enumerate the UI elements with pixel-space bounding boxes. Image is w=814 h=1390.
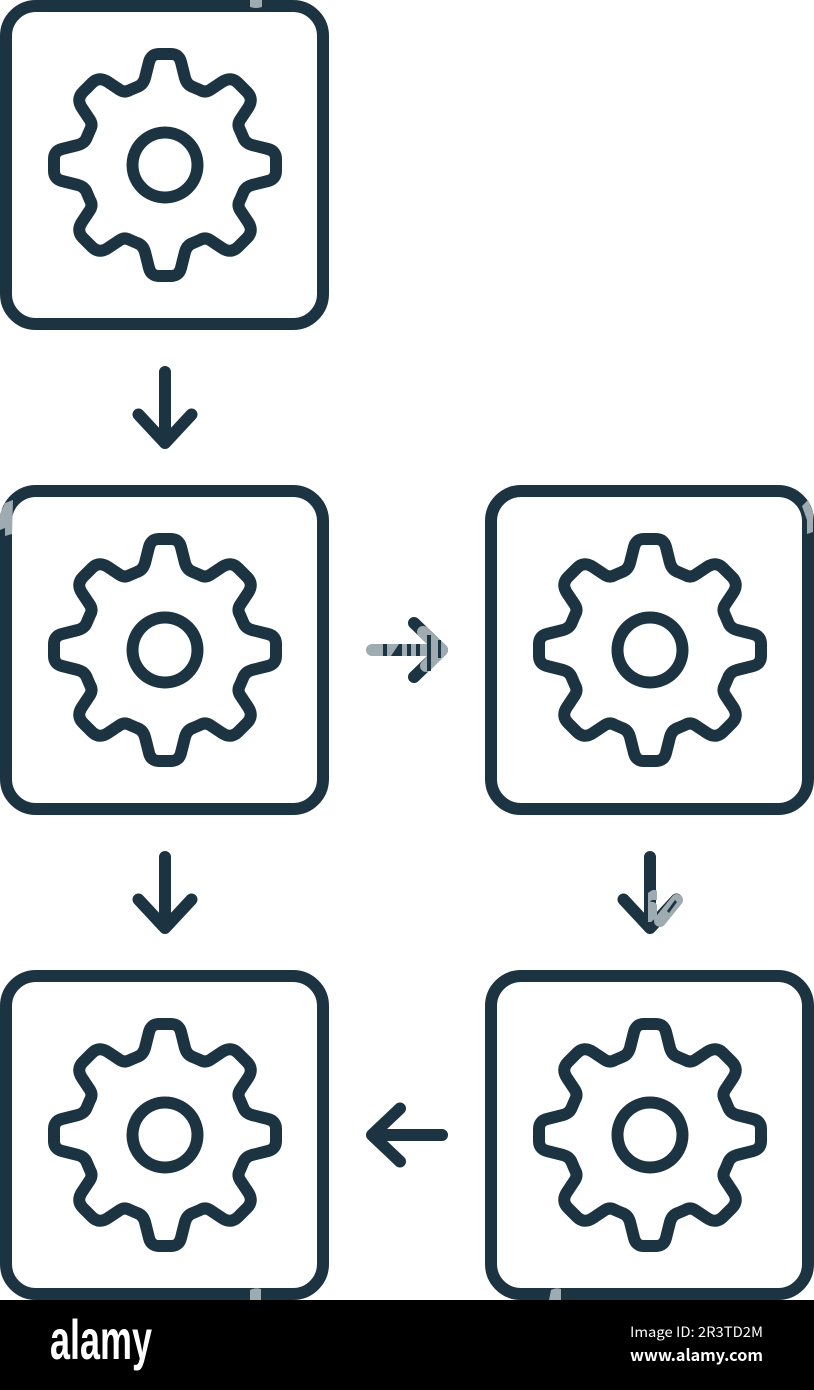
footer bar [0,1300,814,1390]
icon: gear bottom left [54,1024,276,1246]
website: www.alamy.com [630,1342,763,1366]
image id: Image ID: 2R3TD2M [630,1322,763,1342]
panel: gear card top left [6,6,323,324]
arrow: down to middle left [138,372,192,443]
icon: gear bottom right [539,1024,761,1246]
icon: gear middle left [54,539,276,761]
panel: gear card middle right [491,491,808,809]
arrow: down to bottom right [624,857,677,928]
arrow: right to middle right [372,623,442,677]
panel: gear card bottom left [6,976,323,1294]
panel: gear card middle left [6,491,323,809]
arrow: down to bottom left [138,857,192,928]
logo: alamy: alamy [50,1308,152,1371]
icon: gear middle right [539,539,761,761]
panel: gear card bottom right [491,976,808,1294]
icon: gear top left [54,54,276,276]
arrow: left to bottom left [372,1108,442,1162]
